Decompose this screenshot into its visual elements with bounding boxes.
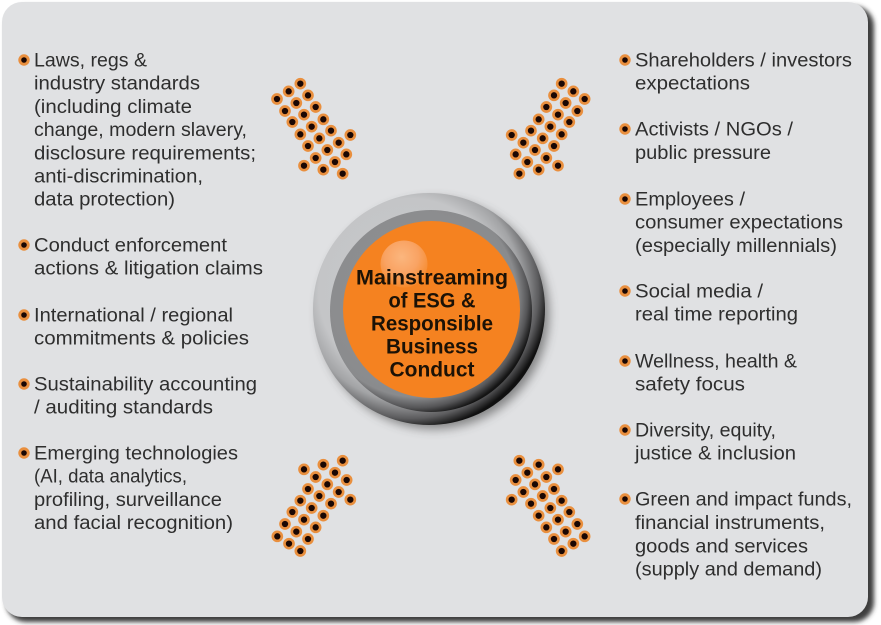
badge highlight	[380, 240, 428, 288]
item: employees: (especially millennials)	[635, 236, 837, 257]
item: conduct enforcement: Conduct enforcement	[34, 236, 228, 256]
item: green funds: goods and services	[635, 536, 808, 557]
item: international commitments: commitments & policies	[34, 329, 249, 350]
item: activists: Activists / NGOs /	[635, 120, 794, 140]
item: wellness: Wellness, health &	[635, 352, 797, 372]
central title: Mainstreaming	[356, 266, 508, 290]
central title: of ESG &	[388, 290, 476, 312]
item: emerging technologies: (AI, data analytics,	[34, 467, 187, 488]
item: shareholders: expectations	[635, 74, 750, 95]
item: emerging technologies: profiling, surveillance	[34, 490, 222, 511]
badge inner ring	[330, 210, 532, 412]
item: green funds: financial instruments,	[635, 513, 825, 534]
item: laws and regulations: disclosure requirements;	[34, 143, 256, 164]
item: wellness: safety focus	[635, 375, 745, 396]
central title: Responsible	[371, 312, 493, 336]
left column of drivers	[18, 50, 263, 534]
item: laws and regulations: anti-discrimination,	[34, 166, 203, 188]
item: green funds: Green and impact funds,	[635, 490, 852, 510]
item: social media	[619, 282, 798, 326]
item: employees	[619, 190, 843, 257]
arrow: bottom right dotted arrow pointing to centre	[507, 456, 589, 555]
item: green funds: (supply and demand)	[635, 560, 822, 581]
item: diversity: justice & inclusion	[634, 444, 796, 465]
item: social media: real time reporting	[635, 305, 798, 326]
item: emerging technologies: Emerging technologies	[34, 444, 238, 464]
item: laws and regulations: change, modern slavery,	[34, 120, 247, 141]
item: sustainability accounting: Sustainability accounting	[34, 374, 257, 396]
arrow: top left dotted arrow pointing to centre	[272, 79, 355, 178]
central title: Conduct	[390, 358, 474, 382]
item: laws and regulations: (including climate	[34, 97, 192, 118]
item: wellness	[619, 352, 797, 396]
item: conduct enforcement	[18, 236, 263, 280]
item: international commitments	[18, 306, 249, 350]
item: laws and regulations: Laws, regs &	[34, 50, 147, 72]
item: activists	[619, 120, 794, 164]
item: diversity	[619, 420, 796, 465]
central title	[356, 266, 508, 382]
item: international commitments: International / regional	[34, 306, 233, 326]
badge outer shadow	[319, 199, 549, 429]
central title: Business	[386, 336, 478, 358]
item: sustainability accounting	[18, 374, 257, 419]
item: conduct enforcement: actions & litigation claims	[34, 259, 263, 280]
arrow: bottom left dotted arrow pointing to centre	[273, 456, 355, 555]
item: shareholders	[619, 50, 852, 95]
item: employees: consumer expectations	[635, 213, 843, 234]
item: sustainability accounting: / auditing standards	[34, 398, 213, 419]
item: emerging technologies	[18, 444, 238, 534]
item: laws and regulations: industry standards	[34, 74, 200, 95]
item: laws and regulations	[18, 50, 256, 211]
item: shareholders: Shareholders / investors	[635, 50, 852, 72]
right column of drivers	[619, 50, 852, 581]
item: employees: Employees /	[635, 190, 746, 210]
item: diversity: Diversity, equity,	[635, 420, 776, 442]
central concentric circle badge	[313, 193, 549, 429]
badge outer ring	[313, 193, 545, 425]
item: activists: public pressure	[635, 143, 771, 164]
badge orange disc	[343, 221, 520, 398]
arrow: top right dotted arrow pointing to centre	[507, 79, 589, 178]
item: green funds	[619, 490, 852, 581]
item: laws and regulations: data protection)	[34, 190, 175, 211]
item: social media: Social media /	[635, 282, 764, 302]
item: emerging technologies: and facial recognition)	[34, 513, 233, 534]
